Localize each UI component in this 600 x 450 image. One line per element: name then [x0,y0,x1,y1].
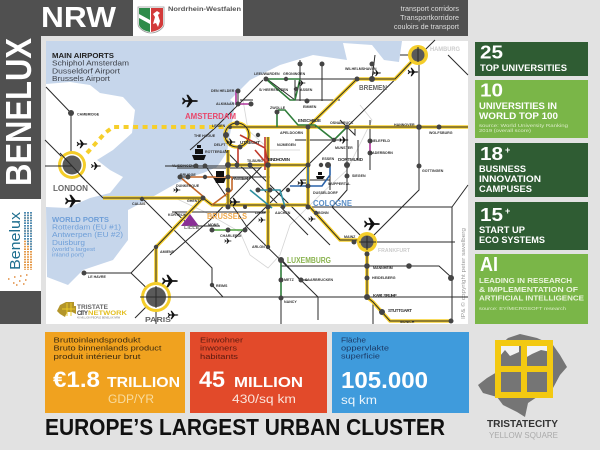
city labels: AACHEN [275,211,291,215]
Lille marker [181,214,199,226]
map panel [45,40,468,324]
city labels: BONN [318,211,329,215]
city labels: METZ [284,278,295,282]
city labels: ASSEN [300,88,313,92]
world ports text: Rotterdam (EU #1) [52,222,122,232]
city labels: DELFT [214,143,226,147]
city labels: TILBURG [247,159,263,163]
transport corridors header: transport corridors [401,4,459,13]
world ports text: (world's largest [52,247,96,253]
land background [46,41,468,324]
city labels: ALKMAAR [216,102,235,106]
transport corridors header: couloirs de transport [394,22,459,31]
main airports text: Schiphol Amsterdam [52,58,129,68]
panel: start up eco systems: START UP [479,225,525,235]
panel: AI: LEADING IN RESEARCH [479,276,572,285]
city labels: LE HAVRE [88,275,107,279]
city labels: EMMEN [303,105,317,109]
major city names: LILLE [184,225,200,231]
city labels: BIELEFELD [370,139,390,143]
Nordrhein-Westfalen logo: Nordrhein-Westfalen [168,6,241,13]
city labels: UTRECHT [240,140,260,145]
sea [46,41,402,285]
TristateCity yellow square logo: TRISTATECITY [487,418,558,430]
city labels: WOLFSBURG [429,131,453,135]
left column dark base [0,291,41,324]
panel: start up eco systems: 15 [480,204,503,225]
city labels: MUNSTER [335,146,353,150]
borders [175,100,372,268]
city labels: APELDOORN [280,131,303,135]
major city names [53,47,460,324]
station nodes [68,62,454,324]
transport corridors header: Transportkorridore [400,13,459,22]
card: area: superficie [341,352,380,360]
card: GDP: €1.8 [53,367,100,392]
city labels: DEN HELDER [211,89,235,93]
Tristate City Network logo: 45 MILLION PEOPLE BENELUX NRW [77,316,121,320]
city labels: ROTTERDAM [205,150,228,154]
city labels: SAARBRUCKEN [305,278,334,282]
city labels: CALAIS [132,202,146,206]
transport corridors header [243,0,468,36]
major city names: BREMEN [359,85,387,92]
panel: AI: ARTIFICIAL INTELLIGENCE [479,294,584,302]
main airports text: Brussels Airport [52,74,111,83]
panel: world top 100: 10 [480,80,503,100]
city labels: DUNKERQUE [176,184,200,188]
card: GDP: GDP/YR [108,394,154,406]
city labels: LIEGE [255,211,266,215]
main airports text [52,51,129,83]
city labels: DORTMUND [338,157,364,162]
panel: world top 100: WORLD TOP 100 [479,111,558,121]
dotted yellow air corridor [87,127,232,153]
major city names: BRUSSELS [207,211,247,221]
plane icons [65,68,418,319]
card: population: 430/sq km [232,394,296,406]
city labels: DUSSELDORF [313,191,339,195]
Tristate City Network logo: TRISTATE [77,305,108,311]
thin rail lines [45,40,468,324]
city labels: AMIENS [160,250,175,254]
card: GDP: Bruto binnenlands product [54,344,162,353]
card: area: oppervlakte [341,344,389,353]
panel: business campuses: 18 [480,143,503,164]
coloured corridors [180,79,370,300]
city labels: GRONINGEN [283,72,306,76]
Nordrhein-Westfalen logo [133,0,243,36]
card: population: 45 [199,367,225,392]
copyright: IP& © copyright peter savelberg [460,228,467,319]
city labels: ENSCHEDE [298,118,321,123]
panel: AI: & IMPLEMENTATION OF [479,285,578,294]
card: population [190,332,327,413]
city labels: WUPPERTAL [328,182,351,186]
card: population: habitants [200,352,238,361]
panel: world top 100: 2019 (overall score) [479,128,531,134]
world ports text [52,215,124,258]
city labels: STUTTGART [388,308,412,313]
city labels: OSNABRUCK [330,121,354,125]
world ports text: inland port) [52,252,84,258]
city labels: EINDHOVEN [268,157,290,162]
card: area [332,332,469,413]
NRW heading [41,0,133,36]
major city names: LONDON [53,184,88,193]
major city names: PARIS [145,315,171,324]
NRW heading: NRW [41,2,117,34]
panel: start up eco systems [475,202,588,250]
city labels: NIJMEGEN [277,143,296,147]
Benelux logo panel [0,199,41,291]
world ports text: Antwerpen (EU #2) [52,230,124,239]
city labels: PADERBORN [370,151,393,155]
panel: world top 100: UNIVERSITIES IN [479,101,557,111]
major city names: AMSTERDAM [185,112,236,121]
Benelux logo panel: Benelux [7,211,24,270]
city labels: ESSEN [322,157,335,161]
panel: AI [475,254,588,324]
city labels: S/ HEERENVEEN [259,88,289,92]
city labels: MAINZ [344,235,356,239]
Tristate City Network logo: CITY [77,311,88,317]
main airports text: MAIN AIRPORTS [52,51,114,60]
major city names: HAMBURG [430,47,460,53]
major city names: FRANKFURT [378,248,411,254]
city labels: GOTTINGEN [422,169,444,173]
panel: start up eco systems: + [505,206,510,216]
city labels: MUNICH [400,320,415,324]
card: GDP: produit intérieur brut [54,352,140,361]
main airports text: Dusseldorf Airport [52,66,121,76]
city labels: NANCY [284,300,297,304]
city labels: HANNOVER [394,123,415,127]
panel: AI: source: EY/MICROSOFT research [479,306,566,312]
city labels: ZWOLLE [270,106,286,110]
city labels: LEEUWARDEN [254,72,280,76]
panel: top universities: 25 [480,42,503,62]
panel: business campuses: + [505,145,510,155]
panel: top universities: TOP UNIVERSITIES [480,63,567,73]
card: GDP: TRILLION [107,374,180,391]
card: GDP: Bruttoinlandsprodukt [54,336,140,344]
panel: business campuses [475,143,588,197]
TristateCity yellow square logo [478,334,567,440]
card: area: 105.000 [341,367,428,393]
panel: start up eco systems: ECO SYSTEMS [479,235,545,245]
city labels: ARLON [252,245,265,249]
major city names: COLOGNE [313,198,352,208]
card: GDP [45,332,185,413]
city labels: GHENT [187,199,200,203]
city labels: MONS [208,223,219,227]
card: population: inwoners [200,344,237,353]
city labels: CAMBRIDGE [77,112,100,116]
city labels: THE HAGUE [194,134,216,138]
card: area: sq km [341,395,377,407]
world ports text: WORLD PORTS [52,215,109,224]
city labels: VLISSINGEN [172,164,194,168]
title: EUROPE’S LARGEST URBAN CLUSTER [45,414,445,440]
city labels: LEIDEN [212,124,226,128]
panel: top universities [475,42,588,76]
major city names: LUXEMBURG [287,256,331,265]
city labels: KARLSRUHE [373,293,397,298]
card: population: MILLION [234,374,303,391]
city labels: CHARLEROI [220,234,241,238]
city labels: SIEGEN [352,174,366,178]
card: area: Fläche [341,336,366,344]
panel: business campuses: BUSINESS [479,164,526,174]
main yellow corridors [103,55,468,321]
city labels: BRUGGE [180,173,196,177]
city labels: REIMS [216,284,228,288]
panel: world top 100: source: World University Ranking [479,123,568,129]
world ports text: Duisburg [52,238,85,247]
city labels: WILHELMSHAVEN [345,67,377,71]
card: population: Einwohner [200,336,244,344]
airport hubs [45,45,428,312]
city labels: ANTWERP [232,176,250,181]
panel: business campuses: INNOVATION [479,174,541,184]
ship icons [192,145,325,183]
TristateCity yellow square logo: YELLOW SQUARE [489,431,558,440]
city labels: HEIDELBERG [372,276,396,280]
city labels: MANNHEIM [373,266,393,270]
panel: business campuses: CAMPUSES [479,184,532,194]
Tristate City Network logo: NETWORK [88,311,128,317]
city labels [77,67,453,324]
Tristate City Network logo [57,302,128,320]
panel: world top 100 [475,80,588,138]
panel: AI: AI [480,254,498,276]
city labels: KORTRIJK [168,213,187,217]
